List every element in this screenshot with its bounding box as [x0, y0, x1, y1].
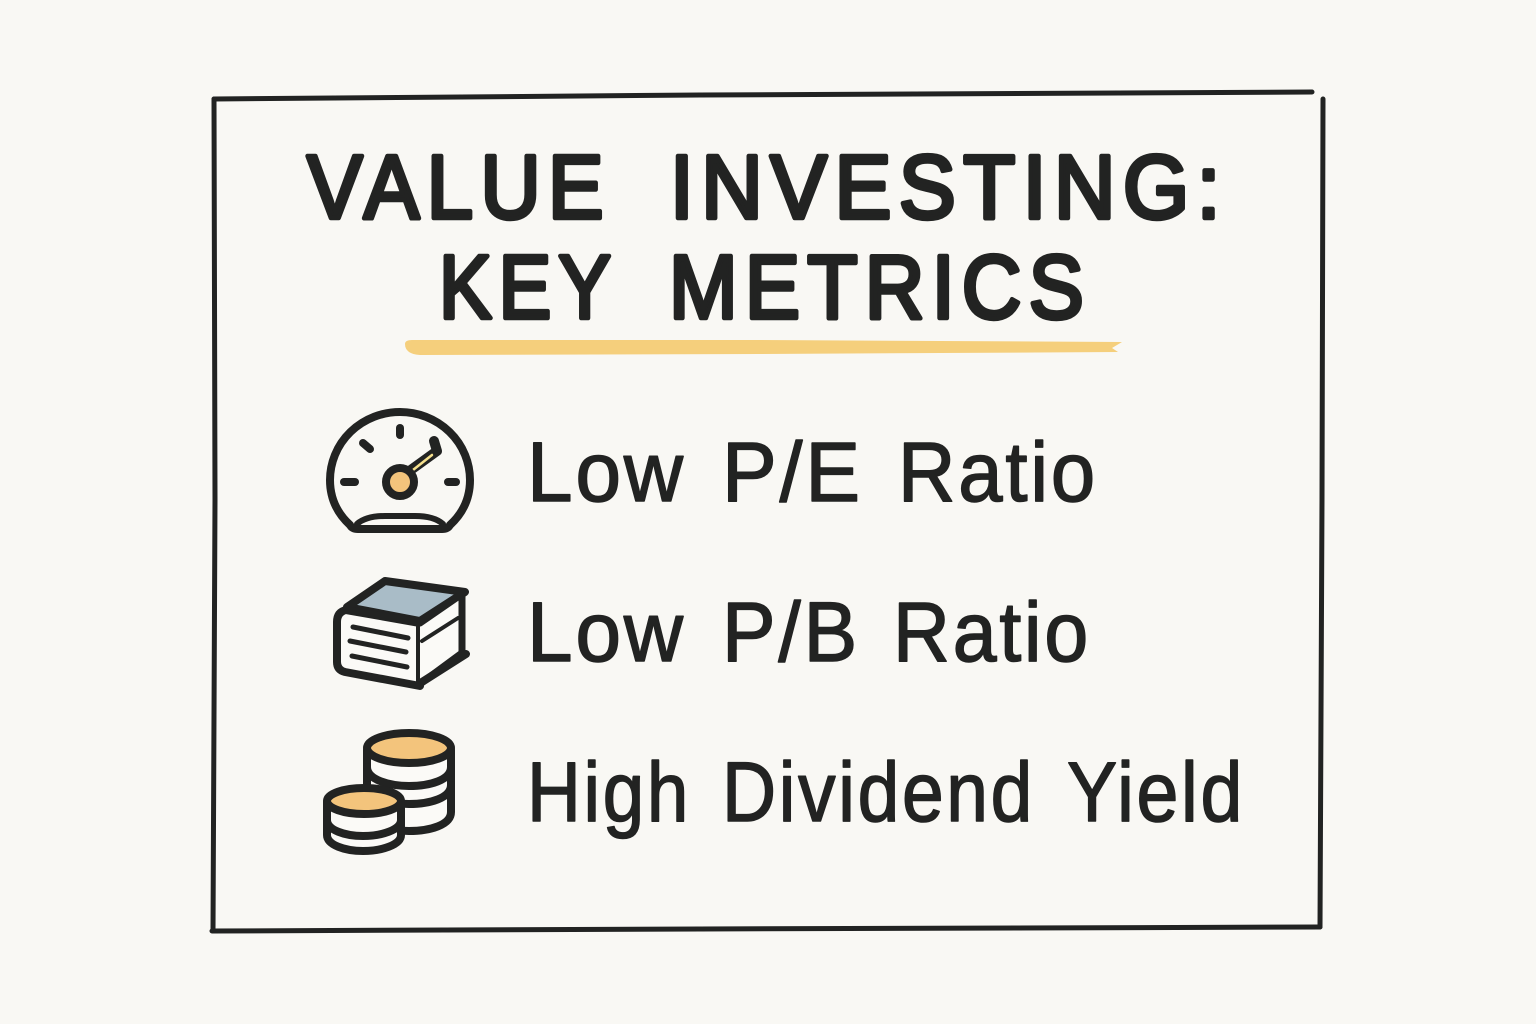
label: Low P/B Ratio: P/B [722, 585, 860, 679]
label: High Dividend Yield: Dividend [722, 745, 1035, 839]
label: High Dividend Yield: Yield [1067, 745, 1245, 839]
title: INVESTING: [670, 138, 1228, 238]
hand-drawn frame [212, 92, 1323, 931]
icon: speedometer gauge [330, 412, 470, 529]
metric: low P/E ratio [330, 412, 1098, 529]
label: High Dividend Yield [527, 745, 1245, 839]
icon: book [337, 581, 466, 686]
label: Low P/B Ratio: Ratio [893, 585, 1091, 679]
label: Low P/B Ratio [527, 585, 1091, 679]
icon: coin stacks [327, 733, 451, 851]
title underline highlight [405, 340, 1122, 355]
label: Low P/E Ratio: Ratio [898, 425, 1098, 519]
title: VALUE [307, 138, 611, 238]
title: KEY [439, 238, 618, 338]
metric: low P/B ratio [337, 581, 1091, 686]
label: Low P/E Ratio [527, 425, 1098, 519]
metric: high dividend yield [327, 733, 1245, 851]
label: Low P/B Ratio: Low [527, 585, 686, 679]
title: METRICS [669, 238, 1091, 338]
label: High Dividend Yield: High [527, 745, 691, 839]
label: Low P/E Ratio: Low [527, 425, 686, 519]
title [307, 138, 1228, 338]
label: Low P/E Ratio: P/E [722, 425, 863, 519]
